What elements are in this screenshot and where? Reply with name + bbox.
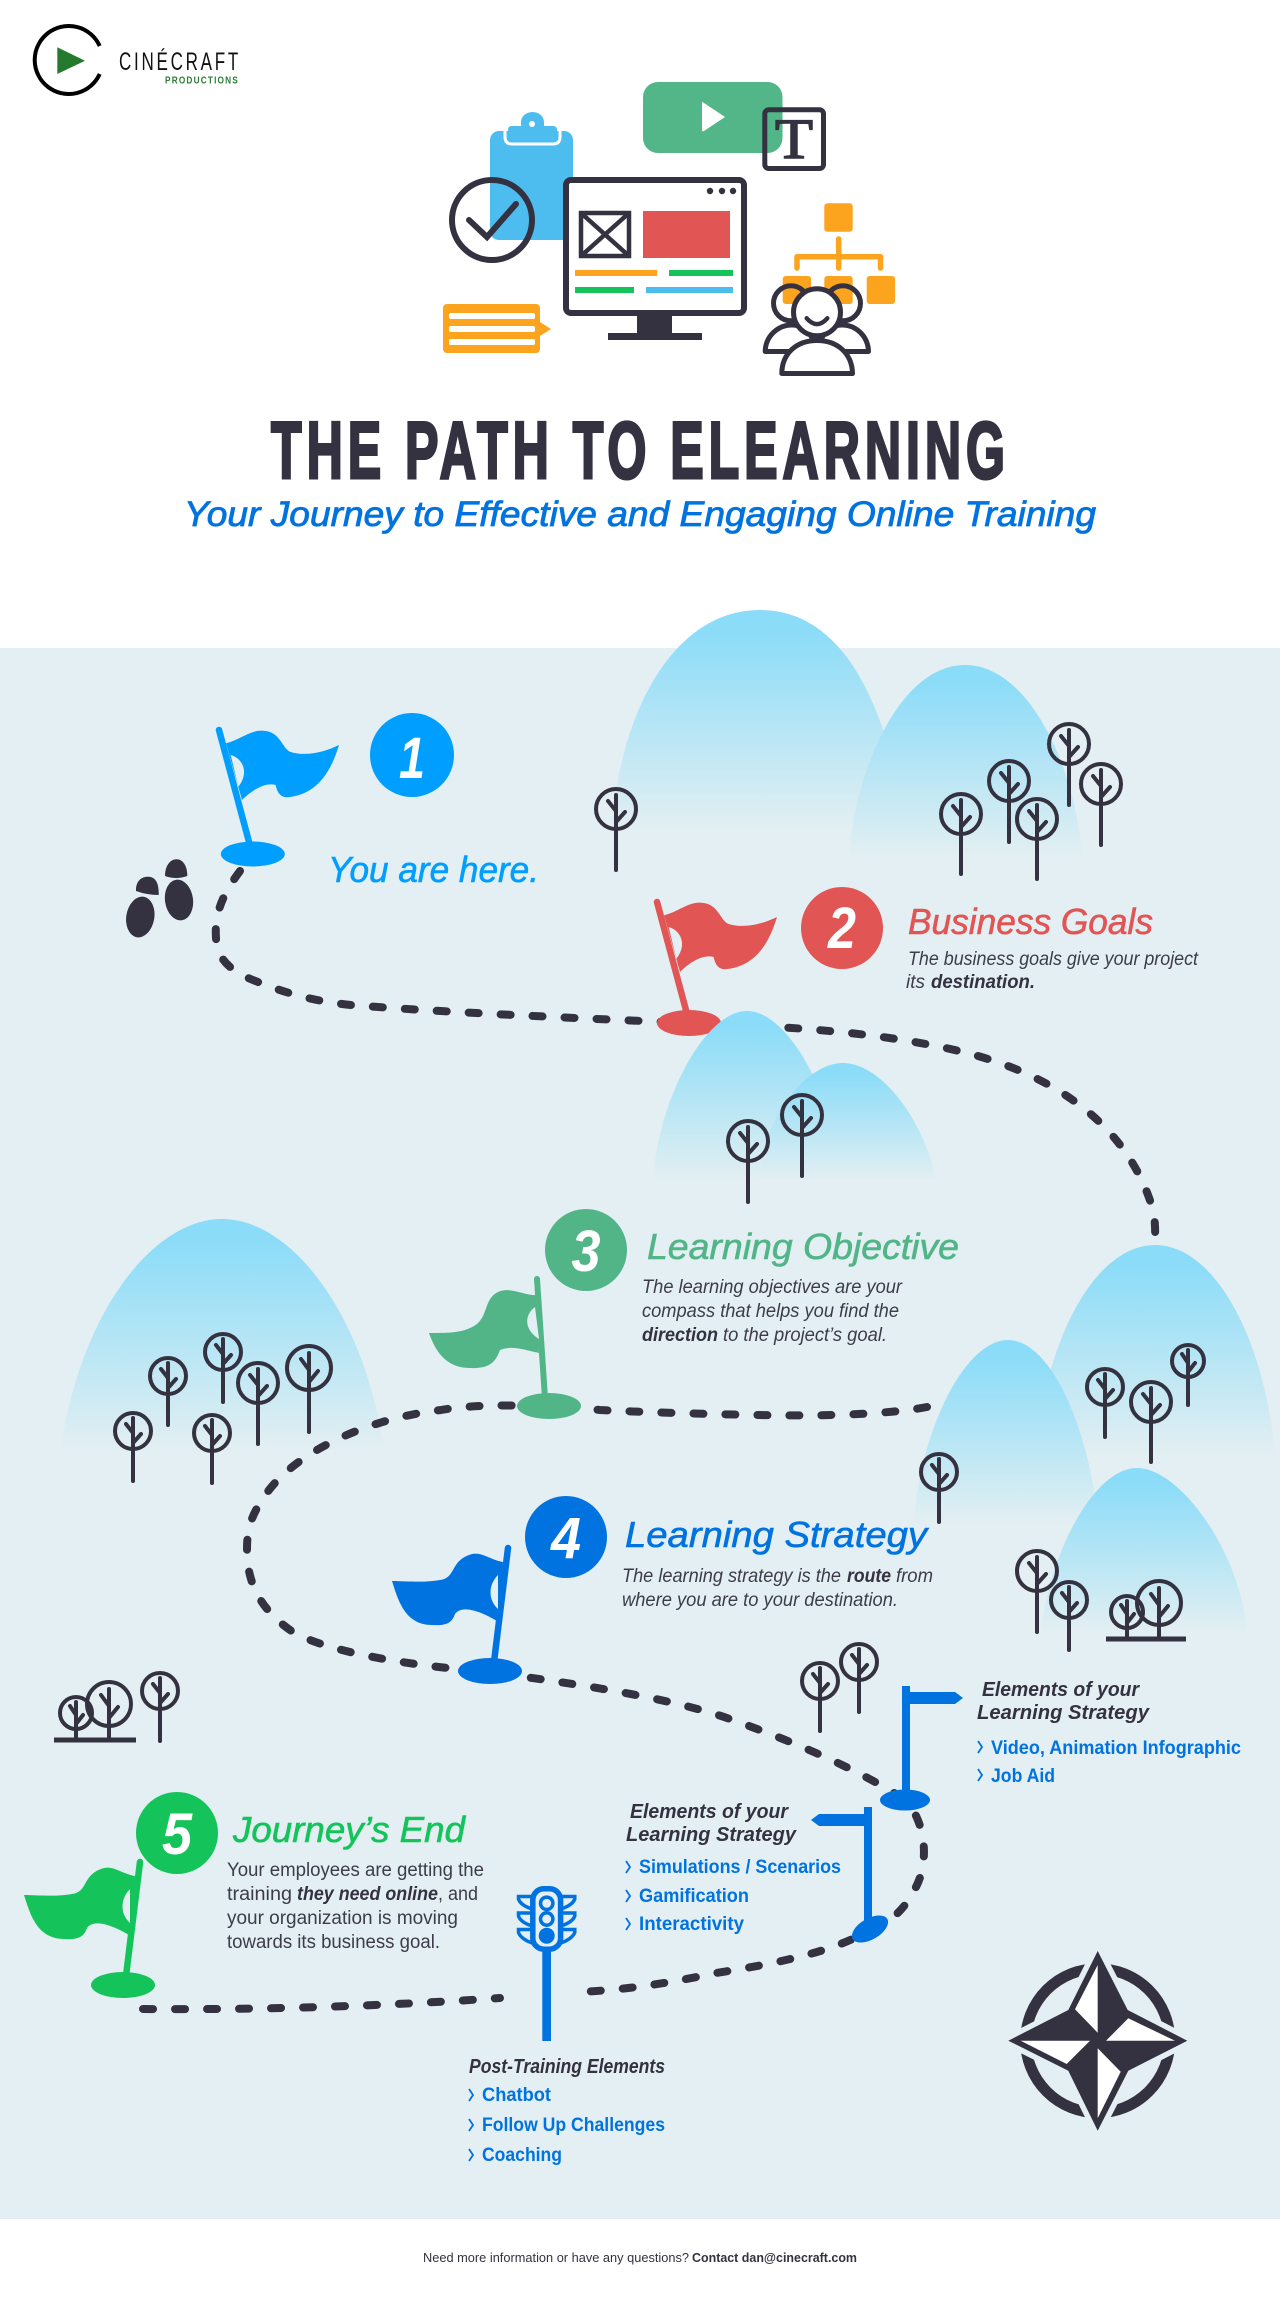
signpost 2 text: Interactivity — [639, 1914, 744, 1935]
step 3: learning objective — [545, 1209, 959, 1346]
mountains centre — [653, 1011, 936, 1180]
signpost 1 text — [977, 1679, 1241, 1787]
mountains right — [914, 1245, 1275, 1632]
tree cluster: right — [921, 1345, 1204, 1650]
icon: people — [765, 286, 868, 374]
tree cluster: centre — [728, 1095, 822, 1202]
signpost 1 text: Learning Strategy — [977, 1702, 1150, 1724]
logo: Cinecraft Productions: PRODUCTIONS — [165, 74, 239, 86]
panel: landscape background — [0, 648, 1280, 2219]
step 4: learning strategy: from — [896, 1566, 933, 1587]
signpost 2 text: Learning Strategy — [626, 1824, 797, 1846]
tree cluster: left — [115, 1334, 331, 1483]
icon: monitor — [566, 180, 744, 340]
tree cluster: top right — [941, 724, 1121, 879]
footer contact line — [423, 2250, 857, 2265]
signpost 1 text: Video, Animation Infographic — [991, 1738, 1241, 1759]
icon: video player — [643, 82, 782, 153]
step 3: learning objective: direction — [642, 1325, 718, 1346]
icon: text box — [765, 108, 824, 171]
step 5: journey's end: training — [227, 1884, 292, 1905]
post-training text: Coaching — [482, 2145, 562, 2166]
step 2: business goals — [801, 887, 1199, 993]
you are here label: You are here. — [328, 849, 539, 890]
post-training text — [469, 2056, 665, 2166]
mountain left — [61, 1219, 384, 1450]
step 5: journey's end: , and — [438, 1884, 478, 1905]
signpost 2 — [811, 1807, 893, 1948]
step 4: learning strategy — [525, 1496, 933, 1611]
logo: Cinecraft Productions — [35, 26, 241, 94]
step 4: learning strategy: 4 — [550, 1506, 581, 1571]
step 3: learning objective: 3 — [572, 1219, 600, 1284]
post-training text: Chatbot — [482, 2085, 552, 2106]
post-training text: Follow Up Challenges — [482, 2115, 665, 2136]
step 2: business goals: its — [906, 972, 926, 993]
footer contact line: Contact dan@cinecraft.com — [692, 2250, 857, 2265]
flag 3 — [429, 1279, 581, 1419]
step 1 number — [370, 713, 454, 797]
step 3: learning objective: Learning Objective — [647, 1226, 959, 1267]
signpost 2 text: Simulations / Scenarios — [639, 1857, 841, 1878]
step 5: journey's end: they need online — [297, 1884, 438, 1905]
step 3: learning objective: to the project’s goal. — [723, 1325, 887, 1346]
tree: top centre — [596, 789, 636, 870]
step 4: learning strategy: where you are to your destination. — [622, 1590, 898, 1611]
flag 5 — [24, 1862, 155, 1998]
step 5: journey's end: towards its business goal. — [227, 1932, 440, 1953]
footer contact line: Need more information or have any questions? — [423, 2250, 689, 2265]
dashed path: objective to signposts — [247, 1405, 927, 1992]
step 4: learning strategy: The learning strategy is the — [622, 1566, 841, 1587]
tree pair: mid right — [802, 1644, 877, 1731]
logo: Cinecraft Productions: CINÉCRAFT — [119, 47, 241, 76]
signpost 2 text — [626, 1801, 841, 1935]
step 5: journey's end: Journey’s End — [232, 1809, 466, 1850]
icon: text box: T — [775, 108, 813, 171]
signpost 1 text: Job Aid — [991, 1766, 1055, 1787]
icon: compass — [1008, 1951, 1187, 2131]
signpost 1 text: Elements of your — [982, 1679, 1140, 1701]
tree pair on ground: right — [1106, 1581, 1186, 1639]
icon: check circle — [452, 180, 532, 260]
signpost 1 — [880, 1686, 963, 1810]
step 1 number: 1 — [399, 726, 425, 791]
step 2: business goals: Business Goals — [908, 901, 1153, 942]
step 2: business goals: 2 — [827, 896, 856, 961]
signpost 2 text: Gamification — [639, 1886, 749, 1907]
step 3: learning objective: compass that helps you find the — [642, 1301, 899, 1322]
icon: chat lines — [443, 304, 551, 353]
icon: traffic light — [518, 1889, 575, 2041]
flag 1 — [219, 730, 339, 866]
signpost 2 text: Elements of your — [630, 1801, 789, 1823]
icon: footprints — [123, 859, 196, 940]
subtitle: Your Journey to Effective and Engaging Online Training — [184, 495, 1097, 534]
step 4: learning strategy: Learning Strategy — [625, 1514, 929, 1555]
flag 2 — [657, 902, 777, 1036]
mountains top right — [612, 610, 1082, 856]
dashed path: to journey's end — [143, 1998, 500, 2009]
dashed path: start to learning objective — [216, 871, 1155, 1250]
step 2: business goals: The business goals give your project — [908, 949, 1199, 970]
post-training text: Post-Training Elements — [469, 2056, 665, 2078]
step 5: journey's end — [136, 1792, 484, 1953]
tree group on ground: lower left — [54, 1673, 178, 1741]
step 5: journey's end: 5 — [162, 1802, 193, 1867]
hero illustration: eLearning tools — [443, 82, 895, 374]
step 4: learning strategy: route — [847, 1566, 891, 1587]
step 5: journey's end: Your employees are getting the — [227, 1860, 484, 1881]
icon: clipboard — [490, 112, 573, 240]
icon: org chart — [783, 203, 895, 304]
step 3: learning objective: The learning objectives are your — [642, 1277, 903, 1298]
step 2: business goals: destination. — [931, 972, 1035, 993]
step 5: journey's end: your organization is moving — [227, 1908, 458, 1929]
flag 4 — [392, 1548, 522, 1684]
